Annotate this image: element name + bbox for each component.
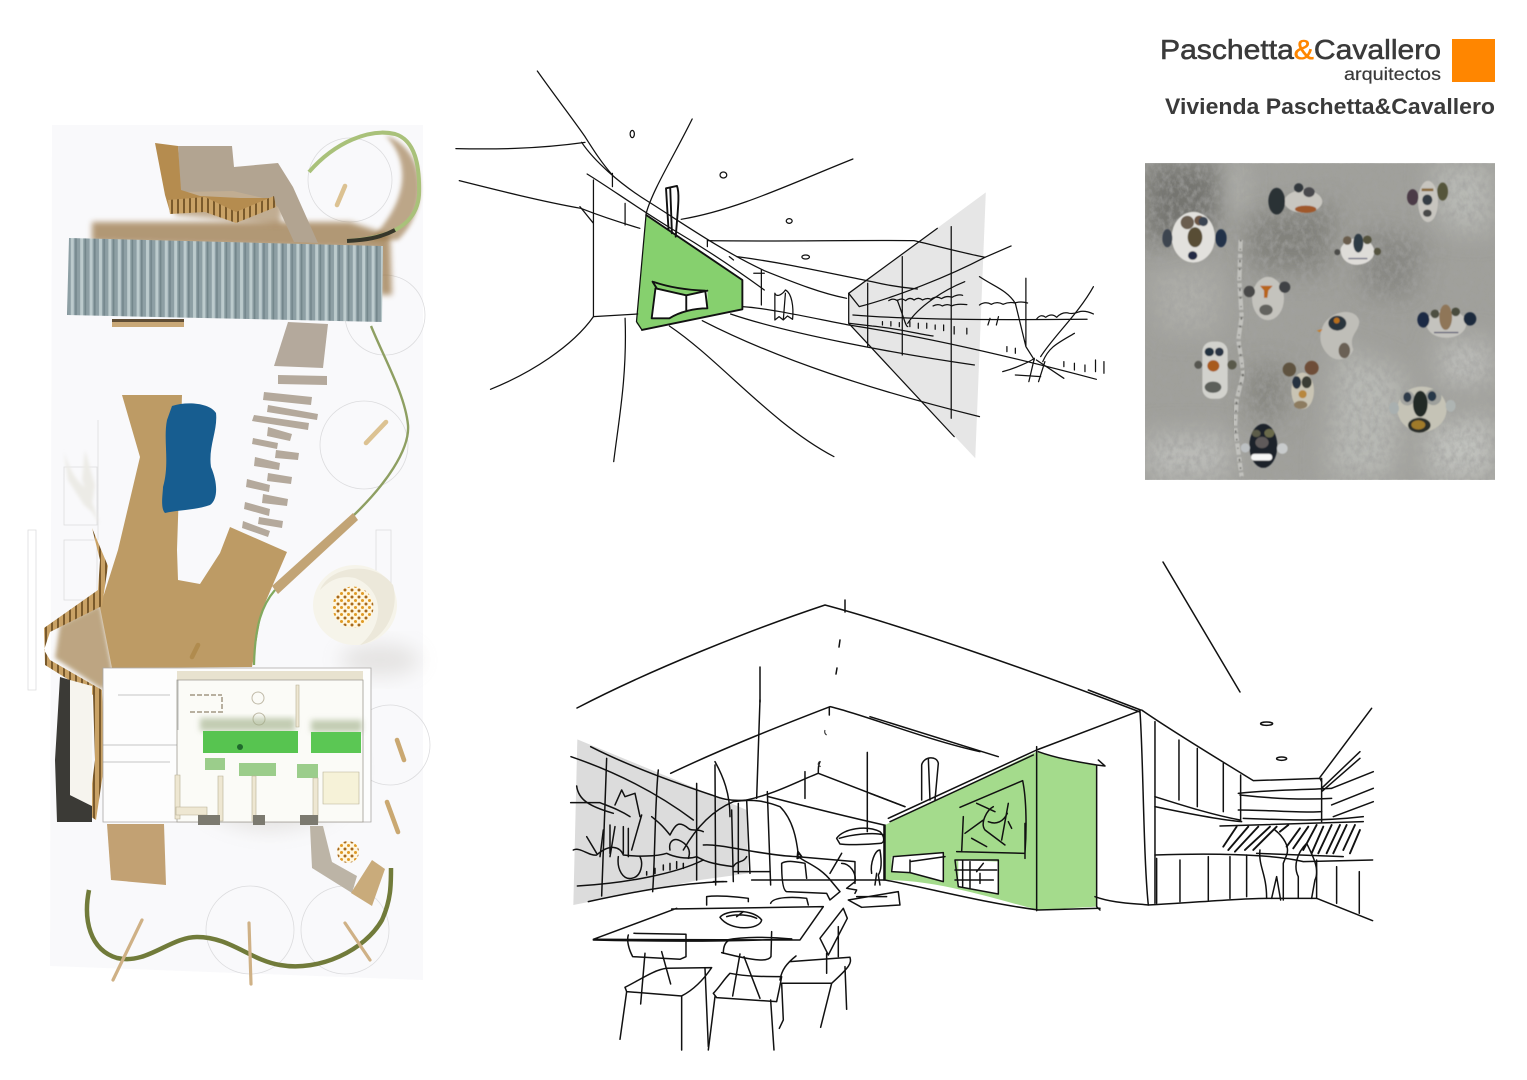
green curved strip top right bbox=[309, 133, 419, 241]
logo orange square bbox=[1452, 39, 1495, 82]
soft shadow over green volumes bbox=[200, 718, 362, 732]
kitchen and volume lines bbox=[870, 690, 1373, 921]
volume windows bbox=[892, 853, 998, 894]
upper shadows bbox=[92, 135, 420, 295]
grey stepping stones bbox=[242, 322, 328, 537]
concrete dark patches bbox=[1145, 163, 1427, 420]
panel: architectural model photo bbox=[28, 125, 430, 984]
stone faces bbox=[1162, 181, 1476, 468]
faint plan drawing lines bbox=[28, 138, 430, 974]
grey garden plane bbox=[573, 739, 748, 905]
corrugated top wall bbox=[155, 143, 276, 223]
left part of interior sketch bbox=[571, 700, 980, 1050]
bottom dowels bbox=[113, 920, 370, 984]
concrete mottled texture bbox=[1145, 163, 1495, 480]
photo: pebble faces on concrete wall bbox=[1145, 163, 1495, 480]
model column shadows bbox=[198, 815, 318, 825]
grey path lower right bbox=[310, 826, 357, 893]
sketch: exterior perspective with green wall bbox=[456, 71, 1104, 462]
small flower disc bbox=[337, 841, 359, 863]
concrete light patches bbox=[1145, 163, 1495, 480]
house shadows bbox=[185, 644, 420, 830]
green wall bbox=[636, 215, 742, 330]
kraft entrance panel bbox=[107, 824, 166, 885]
blue pool bbox=[162, 403, 216, 513]
dowel trees bbox=[192, 186, 404, 832]
wall window bbox=[652, 289, 707, 318]
green volumes bbox=[203, 731, 361, 778]
sketch: interior perspective, kitchen and dining bbox=[571, 562, 1373, 1050]
kraft floor plate bbox=[100, 395, 287, 668]
clay disc with flower pattern bbox=[313, 565, 397, 645]
logo name: Paschetta &Cavallero bbox=[1160, 34, 1441, 65]
green curved strip bottom bbox=[87, 868, 391, 966]
kraft box bbox=[351, 860, 385, 906]
logo subtitle: arquitectos bbox=[1344, 64, 1441, 84]
logo block bbox=[1160, 34, 1495, 84]
house model bbox=[103, 668, 371, 825]
white model walls bbox=[175, 685, 359, 823]
grey card path at top bbox=[178, 146, 318, 243]
grey glazed plane bbox=[849, 192, 986, 458]
shadow beside folded wall bbox=[55, 605, 112, 690]
upper roof lines of interior sketch bbox=[577, 562, 1240, 712]
green volume bbox=[885, 752, 1097, 910]
tree bbox=[979, 277, 1093, 362]
green strip with planter bbox=[254, 326, 408, 665]
corrugated grey bar bbox=[67, 238, 383, 327]
garden, table and chairs lines bbox=[571, 700, 980, 1050]
concrete background bbox=[1145, 163, 1495, 480]
sketch lines bbox=[456, 71, 1104, 462]
white rope texture bbox=[64, 450, 100, 525]
model paper base bbox=[50, 125, 423, 980]
project title: Vivienda Paschetta&Cavallero bbox=[1165, 94, 1495, 119]
concrete crack bbox=[1235, 240, 1243, 476]
corrugated left folded wall bbox=[44, 528, 108, 822]
right part of interior sketch bbox=[870, 690, 1373, 921]
